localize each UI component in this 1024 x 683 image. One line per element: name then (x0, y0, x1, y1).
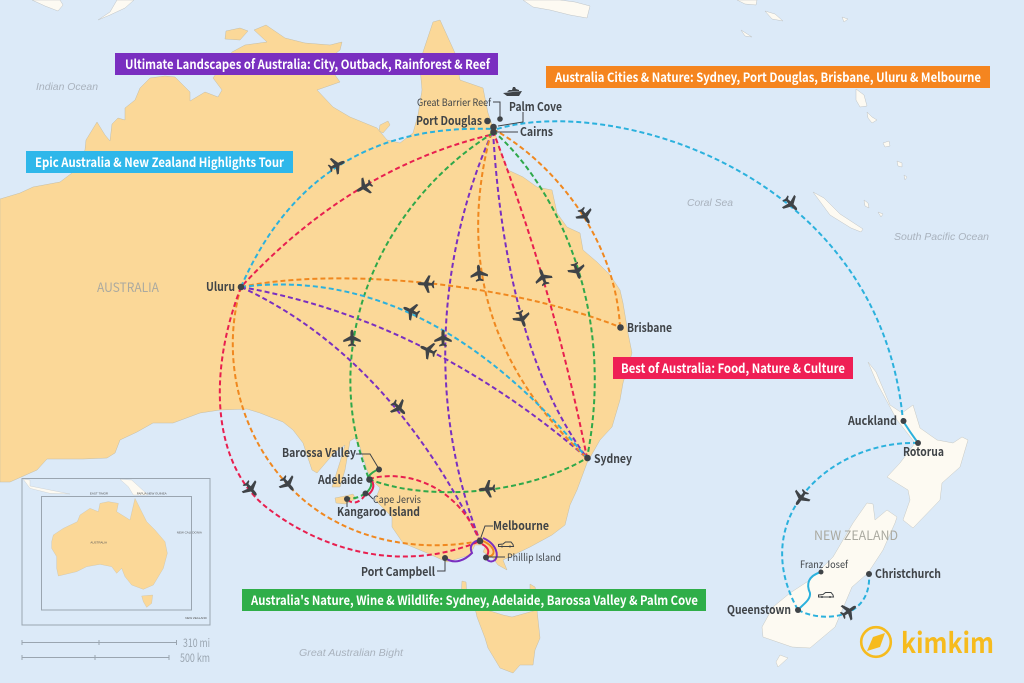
airplane icons (239, 154, 861, 623)
destination labels (206, 94, 944, 618)
destination labels: Sydney (594, 450, 632, 467)
destination labels: Christchurch (875, 565, 941, 582)
kimkim logo (861, 622, 994, 662)
destination labels: Franz Josef (800, 556, 849, 571)
destination labels: Great Barrier Reef (417, 94, 492, 109)
scale bar: miles: 310 mi (183, 635, 210, 651)
map labels: countries and oceans: Indian Ocean (36, 81, 98, 93)
map labels: countries and oceans (36, 81, 989, 659)
land: neighbouring islands (32, 0, 907, 232)
scale bar: kilometres: 500 km (180, 650, 210, 666)
destination labels: Auckland (847, 412, 897, 429)
route: Ultimate Landscapes (purple) (241, 131, 587, 541)
kimkim logo: kimkim (901, 622, 994, 662)
land: New Zealand (762, 362, 968, 667)
land: Australia mainland (0, 20, 632, 570)
scale bar: miles (22, 635, 210, 651)
banner: Epic Australia and New Zealand: Epic Australia & New Zealand Highlights Tour (35, 152, 284, 171)
destination labels: Kangaroo Island (337, 503, 420, 520)
locator inset map: NEW ZEALAND (185, 616, 208, 620)
leader lines (347, 102, 523, 571)
map labels: countries and oceans: Coral Sea (687, 197, 733, 209)
short overland route segments (366, 421, 918, 610)
map labels: countries and oceans: Great Australian Bight (299, 647, 404, 659)
destination labels: Cairns (520, 123, 553, 140)
destination labels: Uluru (206, 278, 235, 295)
destination labels: Adelaide (317, 471, 363, 488)
destination labels: Queenstown (727, 601, 791, 618)
locator inset map: PAPUA NEW GUINEA (137, 491, 167, 495)
destination labels: Phillip Island (507, 549, 561, 564)
destination markers (238, 116, 921, 613)
route: Australia Cities and Nature (orange) (233, 129, 620, 545)
destination labels: Cape Jervis (373, 491, 421, 506)
destination labels: Palm Cove (509, 98, 562, 115)
destination labels: Barossa Valley (282, 444, 356, 461)
destination labels: Port Campbell (361, 563, 435, 580)
icon: cruise ship (503, 87, 522, 96)
map labels: countries and oceans: NEW ZEALAND (814, 525, 898, 544)
banner: Australia's Nature, Wine and Wildlife: Australia's Nature, Wine & Wildlife: Sydney, Adelaide, Barossa Valley & Palm Cove (250, 590, 698, 609)
destination labels: Brisbane (627, 319, 672, 336)
scale bar: kilometres (22, 650, 210, 666)
route: Epic Australia and New Zealand (blue) (241, 121, 918, 617)
icon: car in New Zealand (818, 592, 834, 598)
destination labels: Port Douglas (416, 112, 482, 129)
locator inset map: AUSTRALIA (90, 541, 107, 545)
icon: car near Melbourne (498, 542, 514, 548)
banner: Best of Australia: Best of Australia: Food, Nature & Culture (621, 358, 845, 377)
destination labels: Melbourne (493, 517, 549, 534)
land: small Australian islands (225, 28, 540, 673)
map labels: countries and oceans: AUSTRALIA (97, 277, 159, 296)
banner: Ultimate Landscapes of Australia: Ultimate Landscapes of Australia: City, Outback, Rainforest & Reef (125, 54, 491, 73)
map labels: countries and oceans: South Pacific Ocean (894, 231, 989, 243)
route: Nature, Wine and Wildlife (green) (347, 131, 595, 498)
locator inset map: EAST TIMOR (90, 491, 109, 495)
route: Best of Australia (red) (220, 131, 587, 557)
destination labels: Rotorua (903, 443, 944, 460)
locator inset map (22, 478, 210, 625)
locator inset map: NEW CALEDONIA (177, 530, 202, 534)
